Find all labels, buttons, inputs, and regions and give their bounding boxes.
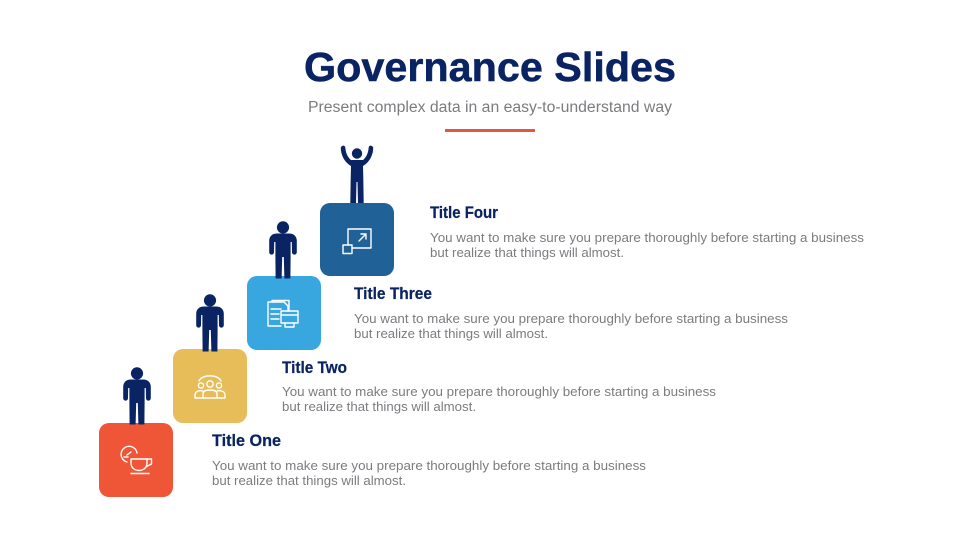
- text block: Title Four: [430, 203, 864, 260]
- person on step 3: [269, 221, 297, 278]
- subtitle: Present complex data in an easy-to-understand way: [308, 99, 672, 116]
- text block: Title One: Title One: [212, 431, 281, 450]
- text block: Title Four: Title Four: [430, 203, 498, 222]
- step 3: light blue block with documents icon: [247, 276, 321, 350]
- text block: Title Two: You want to make sure you prepare thoroughly before starting a business: [282, 385, 716, 399]
- text block: Title Three: You want to make sure you prepare thoroughly before starting a business: [354, 312, 788, 326]
- step 2: yellow block with group icon: [173, 349, 247, 423]
- icon: document and card: [268, 300, 298, 327]
- icon: expand squares: [343, 229, 371, 254]
- text block: Title Three: but realize that things will almost.: [354, 327, 548, 341]
- icon: people group: [195, 376, 225, 398]
- text block: Title One: You want to make sure you prepare thoroughly before starting a business: [212, 459, 646, 473]
- text block: Title One: but realize that things will almost.: [212, 474, 406, 488]
- step 1: red block with coffee icon: [99, 423, 173, 497]
- text block: Title Three: [354, 284, 788, 341]
- text block: Title Two: but realize that things will almost.: [282, 400, 476, 414]
- icon: clock and cup: [121, 446, 152, 474]
- text block: Title Two: Title Two: [282, 358, 347, 377]
- text block: Title Three: Title Three: [354, 284, 432, 303]
- person on step 2: [196, 294, 224, 352]
- step 4: dark blue block with resize icon: [320, 203, 394, 276]
- person on step 1: [123, 367, 151, 424]
- text block: Title Two: [282, 358, 716, 414]
- title: Governance Slides: [304, 44, 676, 90]
- accent underline: [445, 129, 535, 132]
- person with raised arms: [341, 146, 373, 203]
- text block: Title Four: You want to make sure you prepare thoroughly before starting a business: [430, 231, 864, 245]
- text block: Title Four: but realize that things will almost.: [430, 246, 624, 260]
- text block: Title One: [212, 431, 646, 488]
